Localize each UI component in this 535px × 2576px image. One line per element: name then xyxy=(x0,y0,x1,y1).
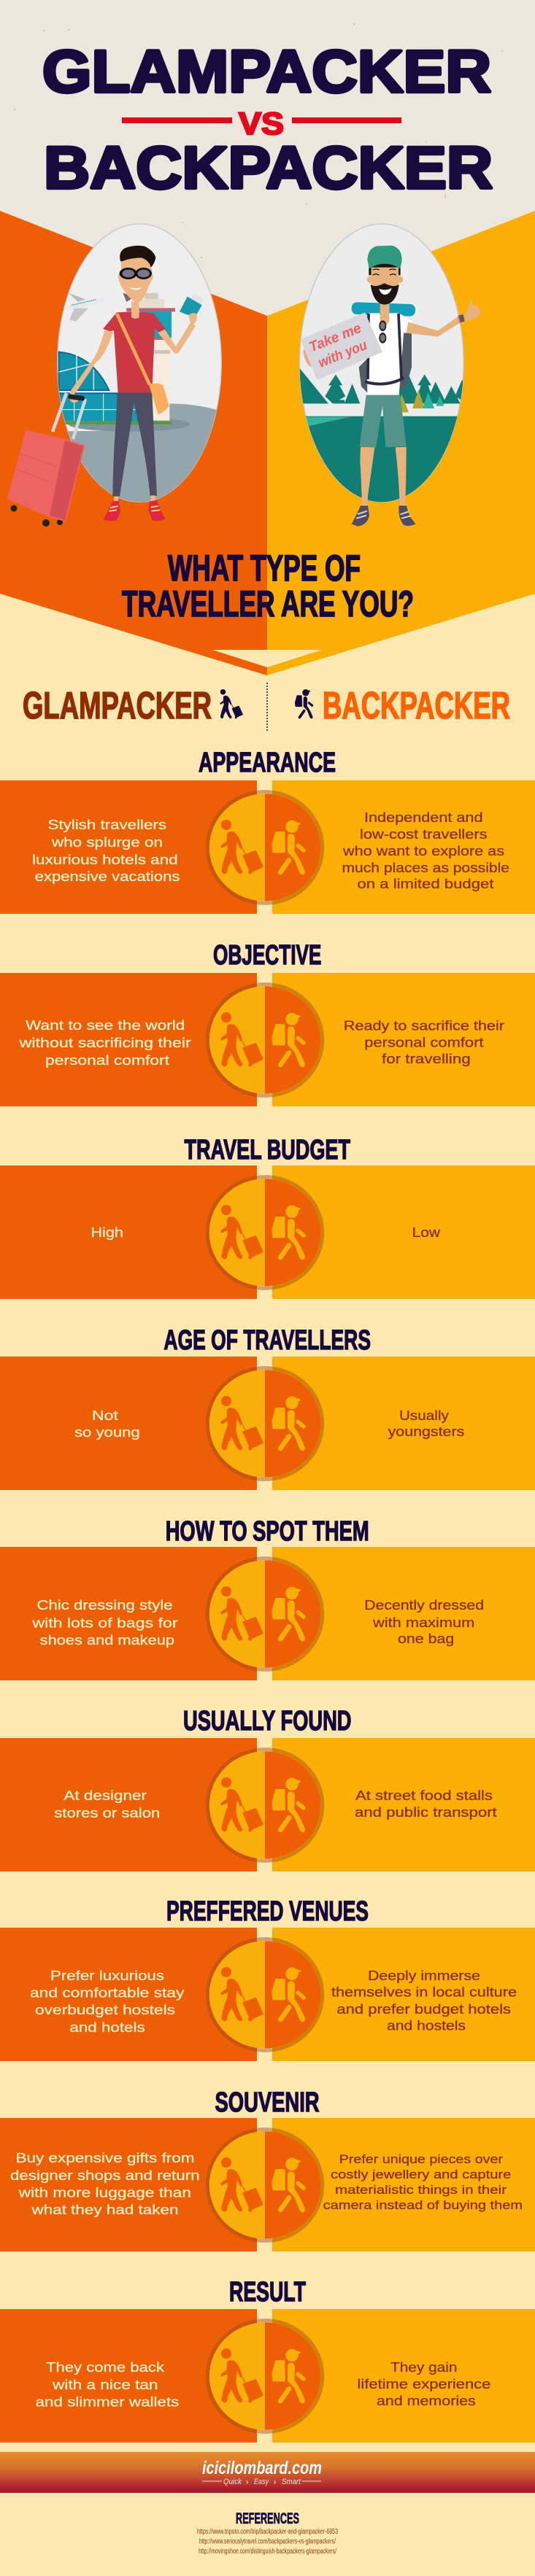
panel: result xyxy=(0,2309,535,2443)
panel: objective: without sacrificing their xyxy=(18,1036,191,1050)
panel: how to spot them: with lots of bags for xyxy=(31,1616,178,1631)
panel: objective: Ready to sacrifice their xyxy=(344,1019,504,1033)
panel: appearance: much places as possible xyxy=(342,861,509,875)
panel: preffered venues: and comfortable stay xyxy=(30,1986,184,2001)
footer band with logo: Easy xyxy=(254,2478,269,2486)
footer band with logo: Quick xyxy=(223,2478,242,2486)
panel: result: lifetime experience xyxy=(358,2377,490,2391)
heading: souvenir: SOUVENIR xyxy=(215,2087,320,2118)
heading: preffered venues: PREFFERED VENUES xyxy=(166,1896,369,1927)
illustration: backpacker xyxy=(297,224,480,527)
references list: http://movingshoe.com/distinguish-backpackers-glampackers/ xyxy=(199,2548,336,2556)
panel: age of travellers: Not xyxy=(92,1408,118,1423)
panel: result: and slimmer wallets xyxy=(36,2395,179,2410)
title: vs with rules xyxy=(122,106,401,141)
panel: souvenir: camera instead of buying them xyxy=(323,2199,523,2212)
panel: travel budget: Low xyxy=(412,1225,441,1240)
panel: preffered venues xyxy=(0,1928,535,2061)
panel: objective xyxy=(0,973,535,1106)
sign: Take me with you: with you xyxy=(316,338,369,371)
panel: preffered venues: and hostels xyxy=(387,2019,466,2033)
heading: result: RESULT xyxy=(229,2277,306,2308)
panel: appearance xyxy=(0,780,535,914)
column header: glampacker: GLAMPACKER xyxy=(23,685,212,727)
panel: appearance: luxurious hotels and xyxy=(32,853,178,867)
panel: how to spot them xyxy=(0,1547,535,1680)
panel: usually found: At street food stalls xyxy=(355,1788,493,1803)
panel: appearance: who want to explore as xyxy=(342,844,504,858)
panel: souvenir: costly jewellery and capture xyxy=(331,2168,511,2181)
heading: how to spot them: HOW TO SPOT THEM xyxy=(166,1516,369,1547)
panel: age of travellers xyxy=(0,1357,535,1490)
panel: appearance: expensive vacations xyxy=(35,869,180,884)
panel: souvenir: materialistic things in their xyxy=(335,2184,507,2197)
panel: age of travellers: so young xyxy=(74,1425,140,1440)
panel: souvenir xyxy=(0,2118,535,2251)
panel: preffered venues: Prefer luxurious xyxy=(50,1968,164,1983)
panel: how to spot them: shoes and makeup xyxy=(40,1633,174,1648)
footer band with logo: Smart xyxy=(282,2478,301,2486)
question heading xyxy=(122,548,414,624)
panel: souvenir: designer shops and return xyxy=(10,2168,200,2183)
panel: souvenir: Prefer unique pieces over xyxy=(339,2153,504,2166)
panel: souvenir: Buy expensive gifts from xyxy=(16,2151,194,2165)
panel: appearance: who splurge on xyxy=(51,835,163,850)
panel: result: They gain xyxy=(390,2360,457,2375)
heading: travel budget: TRAVEL BUDGET xyxy=(184,1135,350,1165)
panel: travel budget: High xyxy=(91,1225,123,1240)
title: BACKPACKER: BACKPACKER xyxy=(44,135,493,201)
panel: how to spot them: with maximum xyxy=(372,1615,474,1630)
panel: result: and memories xyxy=(377,2394,476,2408)
panel: usually found: and public transport xyxy=(355,1805,497,1820)
title: vs with rules: VS xyxy=(239,106,284,141)
title: GLAMPACKER: GLAMPACKER xyxy=(42,39,491,105)
footer band with logo xyxy=(0,2452,535,2493)
panel: result: They come back xyxy=(46,2360,165,2375)
references list: http://www.seriouslytravel.com/backpackers-vs-glampackers/ xyxy=(199,2538,336,2545)
panel: objective: for travelling xyxy=(382,1052,471,1066)
panel: usually found xyxy=(0,1738,535,1871)
panel: age of travellers: youngsters xyxy=(388,1424,464,1439)
references heading: REFERENCES xyxy=(236,2510,299,2527)
footer band with logo: › xyxy=(274,2478,276,2486)
footer band with logo: icicilombard.com xyxy=(202,2458,322,2478)
panel: appearance: on a limited budget xyxy=(358,877,493,891)
panel: preffered venues: themselves in local culture xyxy=(331,1985,517,2000)
panel: usually found: At designer xyxy=(63,1788,147,1803)
panel: appearance: Independent and xyxy=(364,810,483,825)
panel: souvenir: what they had taken xyxy=(31,2203,179,2217)
heading: objective: OBJECTIVE xyxy=(213,940,321,971)
panel: how to spot them: one bag xyxy=(398,1632,454,1646)
question heading: TRAVELLER ARE YOU? xyxy=(122,583,414,624)
panel: appearance: low-cost travellers xyxy=(360,827,488,842)
heading: appearance: APPEARANCE xyxy=(199,748,336,778)
hero chevron: yellow half xyxy=(267,211,535,675)
arrow cut-out xyxy=(212,650,322,667)
panel: result: with a nice tan xyxy=(52,2378,158,2392)
panel: objective: personal comfort xyxy=(364,1036,483,1050)
hero chevron: orange half xyxy=(0,211,267,675)
panel: appearance: Stylish travellers xyxy=(48,818,166,832)
panel: age of travellers: Usually xyxy=(399,1408,449,1423)
panel: preffered venues: overbudget hostels xyxy=(35,2003,175,2017)
references list: https://www.tripoto.com/trip/backpacker-and-glampacker-6853 xyxy=(197,2528,338,2536)
panel: preffered venues: and prefer budget hotels xyxy=(336,2002,511,2017)
illustration: glampacker xyxy=(9,224,239,527)
panel: preffered venues: Deeply immerse xyxy=(368,1968,480,1983)
column divider xyxy=(266,683,268,731)
sign: Take me with you: Take me xyxy=(307,321,363,355)
heading: age of travellers: AGE OF TRAVELLERS xyxy=(163,1325,371,1356)
panel: how to spot them: Chic dressing style xyxy=(36,1598,173,1613)
paper background xyxy=(0,0,535,379)
footer band with logo: › xyxy=(246,2478,248,2486)
panel: preffered venues: and hotels xyxy=(69,2020,145,2035)
heading: usually found: USUALLY FOUND xyxy=(183,1706,352,1737)
question heading: WHAT TYPE OF xyxy=(168,548,361,589)
sign: Take me with you xyxy=(307,321,369,371)
references list xyxy=(197,2528,338,2556)
panel: objective: Want to see the world xyxy=(26,1018,185,1033)
panel: objective: personal comfort xyxy=(45,1053,169,1068)
panel: souvenir: with more luggage than xyxy=(18,2186,191,2200)
panel: how to spot them: Decently dressed xyxy=(364,1598,484,1613)
panel: travel budget xyxy=(0,1165,535,1299)
panel: usually found: stores or salon xyxy=(54,1806,160,1820)
